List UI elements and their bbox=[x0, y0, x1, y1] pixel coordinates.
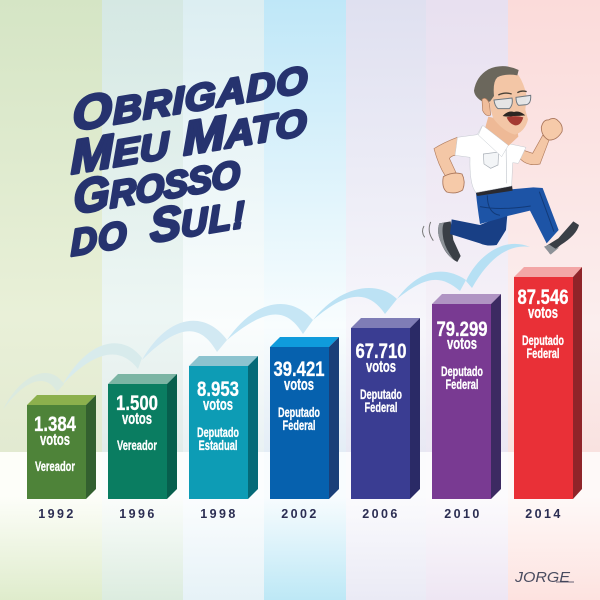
year labels bbox=[38, 507, 563, 521]
bar 1998 bbox=[189, 356, 258, 499]
ear bbox=[482, 98, 491, 116]
front arm bbox=[519, 135, 549, 165]
year labels: 2014 bbox=[525, 507, 563, 521]
bar 2014 bbox=[514, 267, 582, 499]
bar 1998: Deputado bbox=[197, 425, 239, 440]
bar 1992: Vereador bbox=[35, 459, 76, 474]
character: running man bbox=[422, 66, 579, 262]
front hand bbox=[541, 118, 562, 140]
bar 1996: 1.500 bbox=[116, 391, 158, 415]
bar 1992: votos bbox=[40, 430, 70, 449]
face bbox=[489, 74, 528, 135]
body bbox=[422, 118, 579, 262]
title: Obrigado Meu Mato Grosso do Sul!: OBRIGADO bbox=[72, 49, 309, 142]
bar 1998: Estadual bbox=[198, 438, 238, 453]
jump trail arcs bbox=[3, 244, 530, 410]
bar 2002: 39.421 bbox=[274, 357, 325, 381]
bar 2014: 87.546 bbox=[518, 285, 569, 309]
moustache bbox=[503, 111, 525, 117]
bar 2002: votos bbox=[284, 375, 314, 394]
bar 1992: 1.384 bbox=[34, 412, 76, 436]
bar 2014: Deputado bbox=[522, 333, 564, 348]
bar 2010: Deputado bbox=[441, 364, 483, 379]
front shoe bbox=[545, 221, 579, 254]
bar 1996: votos bbox=[122, 409, 152, 428]
year labels: 2010 bbox=[444, 507, 482, 521]
bar 2002: Deputado bbox=[278, 405, 320, 420]
motion lines bbox=[422, 222, 433, 241]
head bbox=[474, 66, 531, 157]
bar 2006: Federal bbox=[364, 400, 398, 415]
year labels: 1998 bbox=[200, 507, 238, 521]
bar 2010 bbox=[432, 294, 501, 499]
bar 2006: Deputado bbox=[360, 387, 402, 402]
bar 1992 bbox=[27, 395, 96, 499]
eyebrows bbox=[498, 91, 527, 95]
jeans bbox=[450, 187, 559, 246]
hair bbox=[474, 66, 519, 102]
shirt bbox=[455, 126, 526, 193]
back hand bbox=[443, 173, 464, 193]
title: Obrigado Meu Mato Grosso do Sul! bbox=[70, 49, 309, 267]
signature: Jorge: JORGE bbox=[514, 569, 571, 586]
bar 2006 bbox=[351, 318, 420, 499]
bar 2002 bbox=[270, 337, 339, 499]
year labels: 1996 bbox=[119, 507, 157, 521]
glasses bbox=[494, 95, 531, 109]
bar 1998: 8.953 bbox=[197, 377, 239, 401]
title: Obrigado Meu Mato Grosso do Sul!: GROSSO bbox=[73, 144, 241, 225]
bar 2010: Federal bbox=[446, 377, 478, 392]
year labels: 2002 bbox=[281, 507, 319, 521]
mouth bbox=[507, 116, 523, 125]
bar 1996 bbox=[108, 374, 177, 499]
bar 2010: 79.299 bbox=[436, 317, 488, 341]
back arm bbox=[434, 137, 461, 176]
bar 2006: votos bbox=[366, 357, 396, 376]
year labels: 2006 bbox=[362, 507, 400, 521]
year labels: 1992 bbox=[38, 507, 76, 521]
title: Obrigado Meu Mato Grosso do Sul!: DO SUL! bbox=[70, 184, 247, 267]
bar 2006: 67.710 bbox=[356, 339, 407, 363]
collar bbox=[478, 125, 508, 157]
bar 2014: Federal bbox=[526, 346, 560, 361]
neck bbox=[485, 117, 518, 146]
back shoe bbox=[438, 221, 461, 262]
bar 2002: Federal bbox=[282, 418, 316, 433]
bar 1998: votos bbox=[203, 395, 233, 414]
belt bbox=[475, 185, 513, 196]
bar 2010: votos bbox=[447, 334, 477, 353]
bar 1996: Vereador bbox=[117, 438, 158, 453]
title: Obrigado Meu Mato Grosso do Sul!: MEU MATO bbox=[70, 92, 308, 185]
bar 2014: votos bbox=[528, 303, 558, 322]
